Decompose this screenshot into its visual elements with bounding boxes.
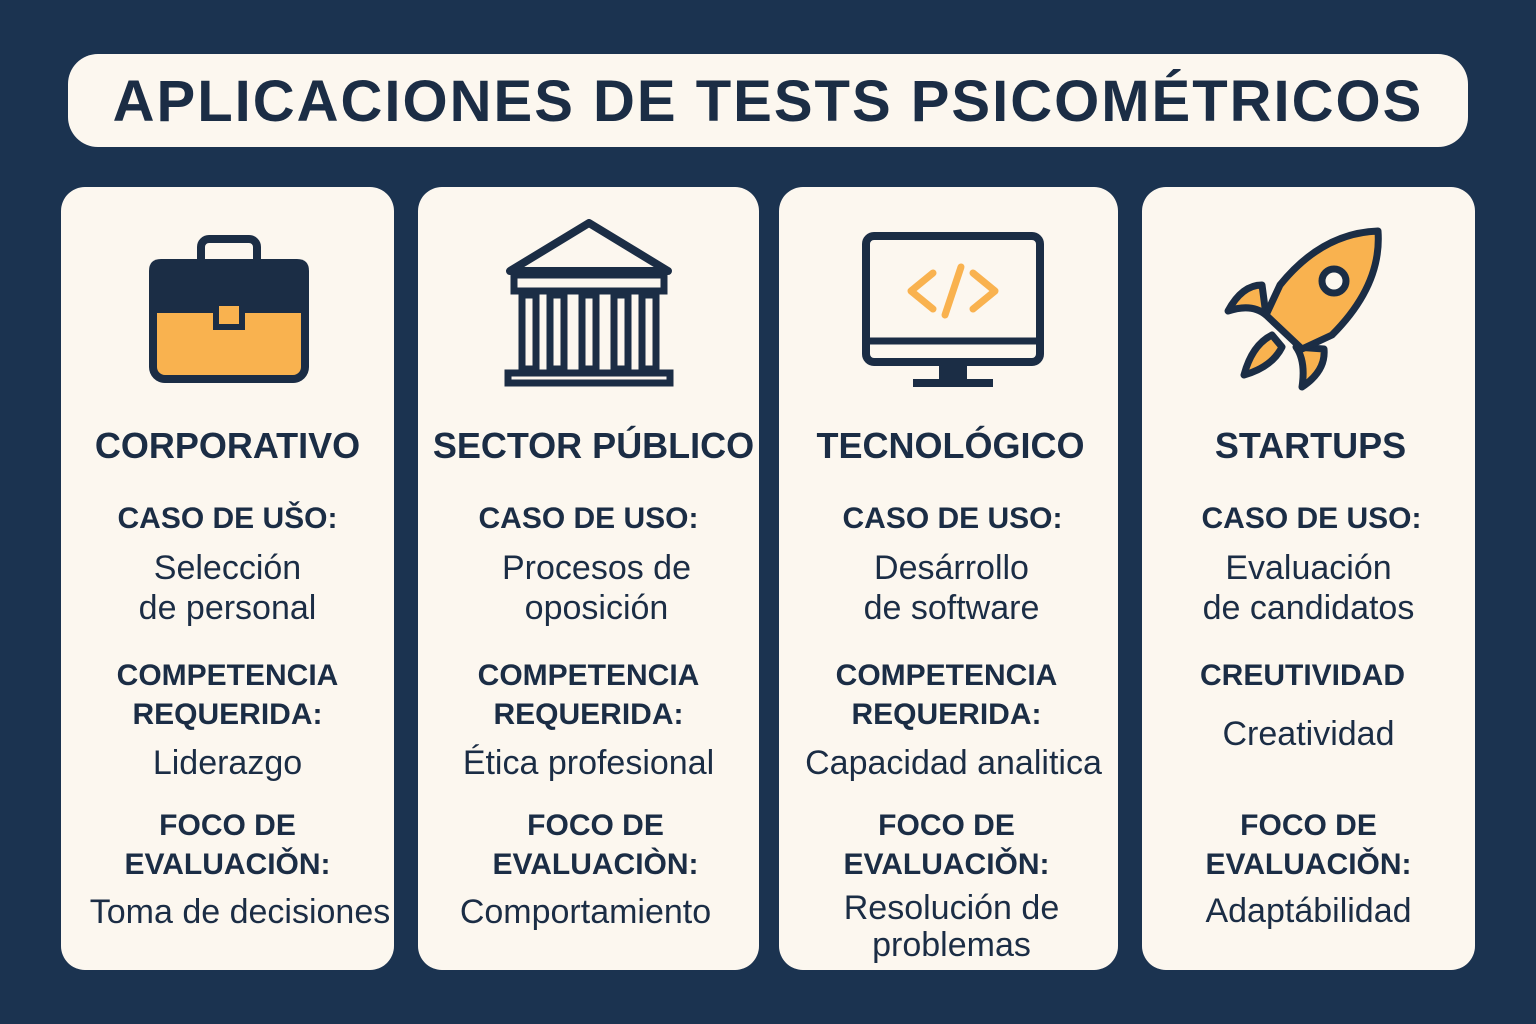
panel: corporativo: Liderazgo <box>153 744 302 782</box>
panel: startups: de candidatos <box>1203 589 1414 627</box>
panel: tecnologico: COMPETENCIA <box>836 659 1057 692</box>
panel: tecnologico: Desárrollo <box>874 549 1029 587</box>
panel: sector publico: EVALUACIÒN: <box>492 848 699 881</box>
heading: CORPORATIVO <box>95 425 360 466</box>
icon: rocket <box>1224 228 1382 390</box>
icon: bank <box>504 219 674 386</box>
panel: tecnologico: REQUERIDA: <box>851 698 1042 731</box>
panel: startups: CREUTIVIDAD <box>1200 659 1405 692</box>
panel: sector publico: Comportamiento <box>460 893 711 931</box>
panel: sector publico: COMPETENCIA <box>478 659 699 692</box>
panel: tecnologico: Capacidad analitica <box>805 744 1102 782</box>
panel: corporativo: EVALUACIǑN: <box>124 848 331 881</box>
panel: startups: Adaptábilidad <box>1205 892 1412 930</box>
panel: startups <box>1142 187 1475 970</box>
panel: corporativo: COMPETENCIA <box>117 659 338 692</box>
panel: startups: FOCO DE <box>1240 809 1377 842</box>
panel: corporativo: REQUERIDA: <box>132 698 322 731</box>
text block: CASO DE USO: <box>1201 502 1422 535</box>
panel: tecnologico: problemas <box>872 926 1031 964</box>
text block: CASO DE USO: <box>478 502 699 535</box>
panel: sector publico: Ética profesional <box>463 744 714 782</box>
panel: sector publico <box>418 187 759 970</box>
text block: CASO DE UŠO: <box>117 502 338 535</box>
heading: SECTOR PÚBLICO <box>433 425 754 466</box>
panel: sector publico: REQUERIDA: <box>493 698 684 731</box>
panel: sector publico: Procesos de <box>502 549 691 587</box>
panel: startups: Evaluación <box>1225 549 1392 587</box>
icon: monitor code <box>862 232 1044 387</box>
panel: corporativo: de personal <box>139 589 316 627</box>
panel: corporativo: FOCO DE <box>159 809 296 842</box>
panel: startups: EVALUACIǑN: <box>1205 848 1412 881</box>
title <box>68 54 1468 147</box>
panel: sector publico: oposición <box>525 589 668 627</box>
panel: corporativo <box>61 187 394 970</box>
title: APLICACIONES DE TESTS PSICOMÉTRICOS <box>113 69 1423 134</box>
panel: tecnologico <box>779 187 1118 970</box>
panel: tecnologico: de software <box>864 589 1039 627</box>
panel: startups: Creatividad <box>1222 715 1394 753</box>
heading: TECNOLÓGICO <box>816 425 1084 466</box>
panel: tecnologico: Resolución de <box>844 889 1059 927</box>
icon: briefcase <box>149 235 309 383</box>
panel: corporativo: Toma de decisiones <box>90 893 390 931</box>
panel: sector publico: FOCO DE <box>527 809 664 842</box>
text block: CASO DE USO: <box>842 502 1063 535</box>
panel: corporativo: Selección <box>154 549 301 587</box>
panel: tecnologico: FOCO DE <box>878 809 1015 842</box>
heading: STARTUPS <box>1215 425 1406 466</box>
panel: tecnologico: EVALUACIǑN: <box>843 848 1050 881</box>
